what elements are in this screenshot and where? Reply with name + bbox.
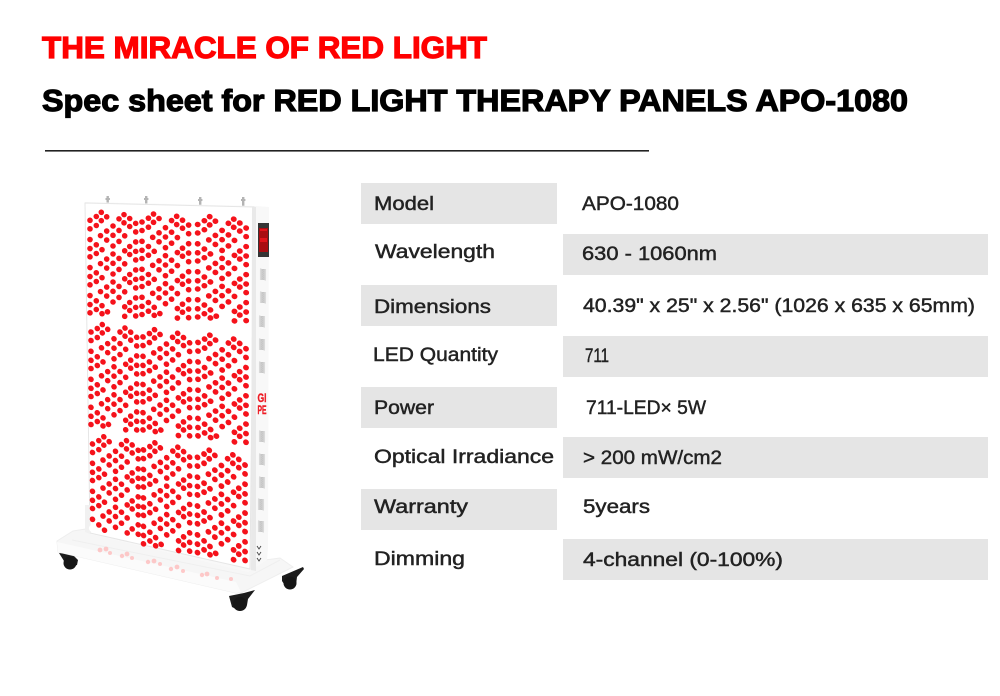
row: dimensions	[361, 285, 975, 326]
row: warranty	[361, 489, 650, 530]
wheel: front	[229, 590, 255, 611]
row: power: Power	[374, 398, 435, 419]
row: model: APO-1080	[582, 194, 679, 215]
row: model	[361, 183, 679, 224]
row: optical irradiance	[374, 437, 988, 478]
left foot upright	[85, 505, 90, 534]
row: wavelength: 630 - 1060nm	[582, 244, 717, 265]
hangers	[106, 196, 245, 206]
panel body	[85, 202, 269, 572]
row: warranty: Warranty	[374, 497, 469, 518]
stand base	[57, 528, 293, 593]
side strip	[251, 207, 256, 571]
row: wavelength: Wavelength	[375, 242, 495, 263]
logo: GI	[258, 391, 266, 405]
vents	[258, 269, 266, 532]
row: dimensions: 40.39" x 25" x 2.56" (1026 x 635 x 65mm)	[583, 296, 975, 317]
row: dimensions: Dimensions	[374, 297, 491, 318]
LED display	[258, 223, 269, 257]
row: LED quantity	[373, 336, 988, 377]
logo: PE	[258, 403, 266, 417]
wheel: back right	[282, 567, 304, 590]
spec table	[361, 183, 988, 580]
row: model: Model	[374, 194, 434, 215]
row: optical irradiance: > 200 mW/cm2	[583, 448, 722, 469]
row: wavelength	[375, 234, 988, 275]
panel face	[85, 203, 254, 569]
row: dimming: Dimming	[374, 549, 465, 570]
logo	[258, 391, 266, 417]
subtitle: spec sheet: Spec sheet for RED LIGHT THERAPY PANELS APO-1080	[42, 83, 908, 118]
wheel: left	[59, 553, 78, 570]
row: LED quantity: LED Quantity	[373, 345, 499, 366]
product image: red light therapy panel on wheeled stand	[57, 196, 304, 611]
row: power	[361, 387, 706, 428]
LED array	[87, 209, 249, 564]
chevrons	[257, 546, 261, 561]
title: the miracle of red light: THE MIRACLE OF RED LIGHT	[42, 30, 487, 65]
row: LED quantity: 711	[585, 346, 609, 367]
row: dimming	[374, 539, 988, 580]
row: power: 711-LED× 5W	[586, 398, 706, 419]
row: optical irradiance: Optical Irradiance	[374, 447, 554, 468]
row: warranty: 5years	[583, 497, 650, 518]
row: dimming: 4-channel (0-100%)	[583, 550, 783, 571]
heading rule	[45, 150, 649, 152]
